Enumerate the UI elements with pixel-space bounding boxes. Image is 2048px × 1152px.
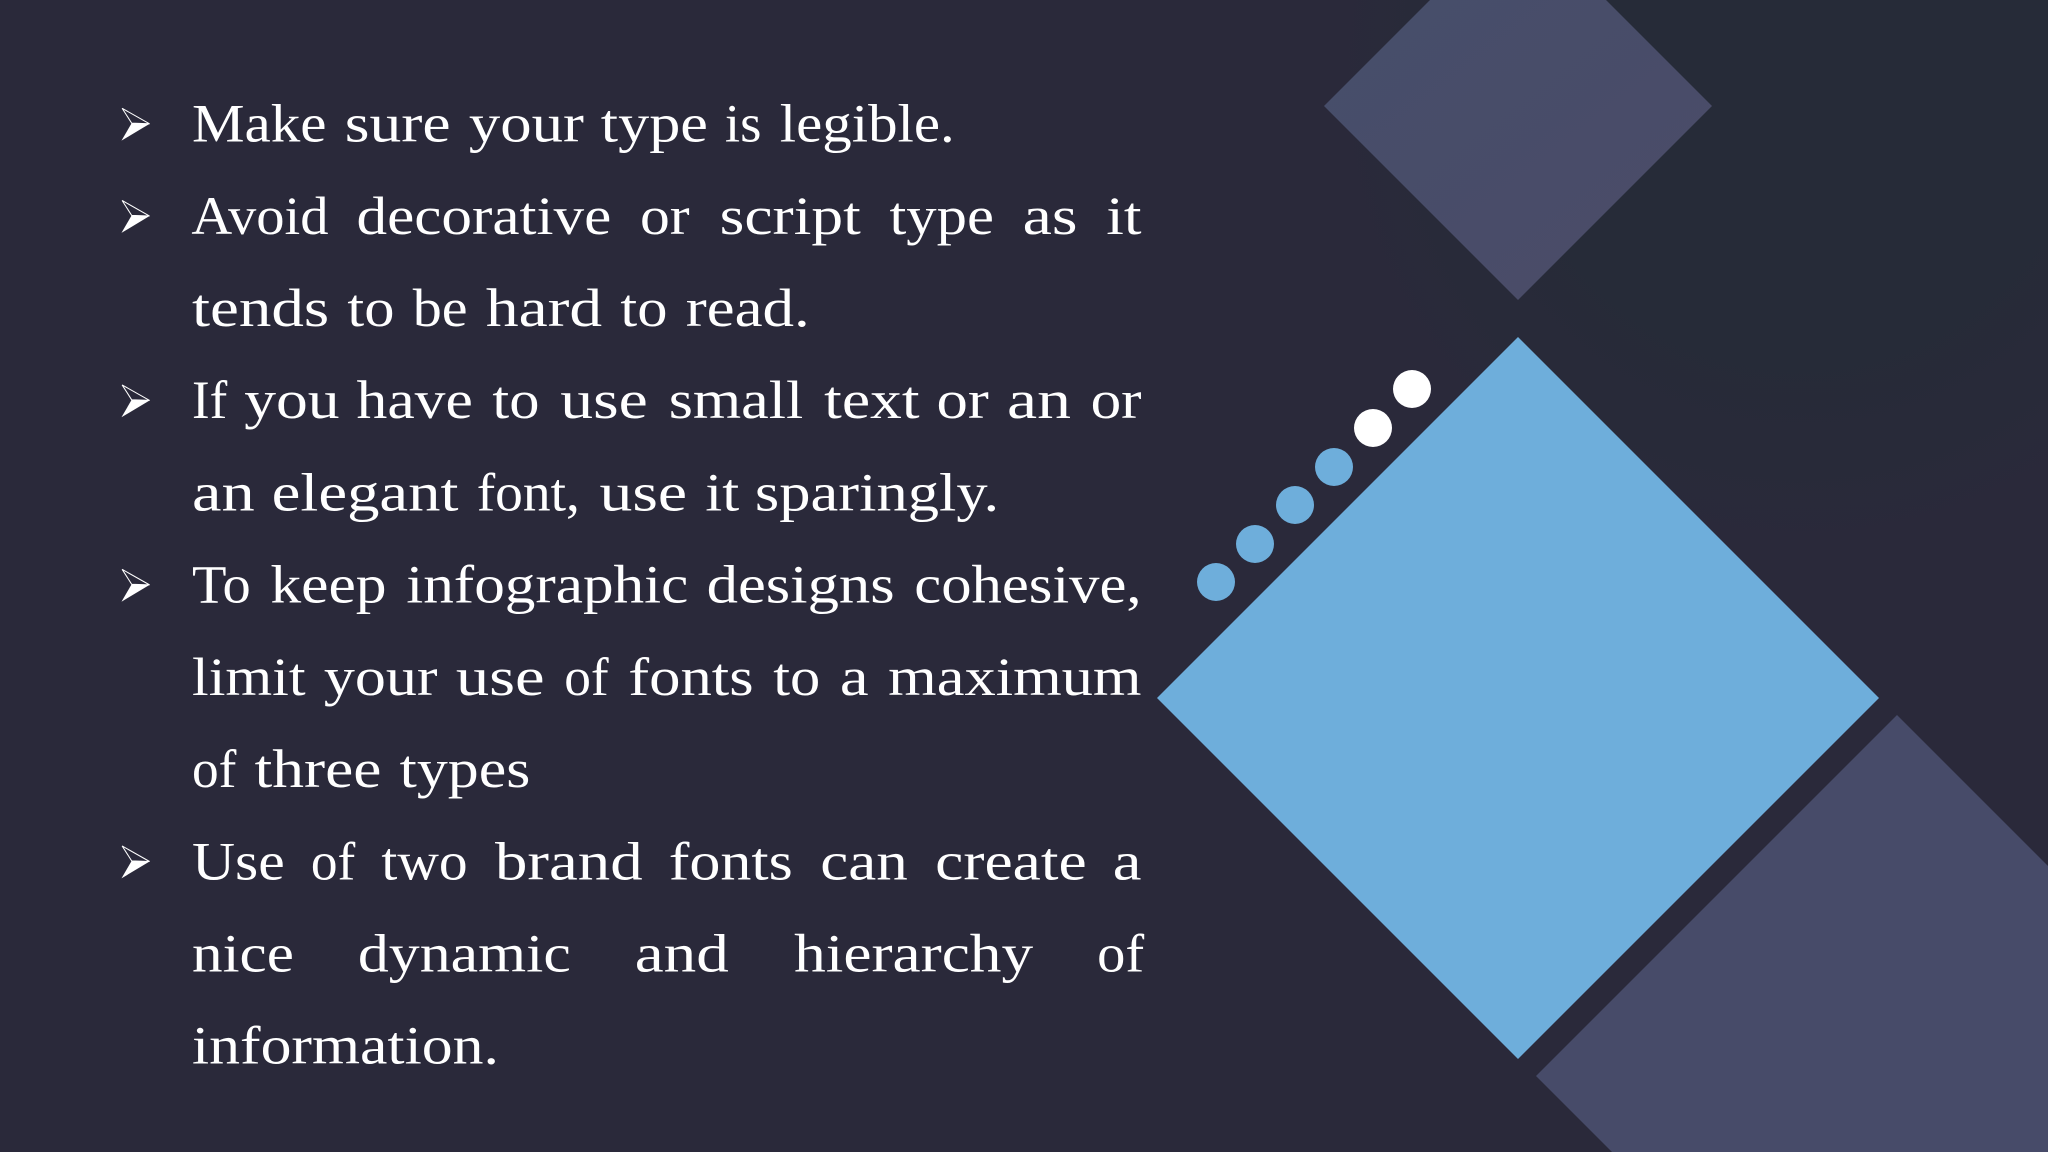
icon: arrow bullet	[121, 846, 150, 878]
bullet 3: small or elegant fonts: sparingly.	[755, 462, 999, 522]
bullet 3: small or elegant fonts: If	[192, 370, 227, 430]
bullet 5: two brand fonts: of	[311, 831, 355, 891]
bullet 2: avoid decorative type: to	[620, 278, 667, 338]
bullet 4: limit fonts: limit	[192, 647, 306, 707]
bullet 2: avoid decorative type: hard	[486, 278, 602, 338]
bullet 2: avoid decorative type: be	[413, 278, 468, 338]
bullet 4: limit fonts: To	[192, 555, 251, 615]
bullet 3: small or elegant fonts: use	[560, 370, 648, 430]
bullet 3: small or elegant fonts: small	[669, 370, 803, 430]
bullet list	[121, 94, 1144, 1076]
bullet 2: avoid decorative type: tends	[192, 278, 329, 338]
bullet 4: limit fonts: a	[840, 647, 869, 707]
bullet 5: two brand fonts: and	[635, 923, 729, 983]
bullet 5: two brand fonts: Use	[192, 831, 285, 891]
icon: arrow bullet	[121, 385, 150, 417]
bullet 4: limit fonts	[121, 555, 1142, 799]
bullet 2: avoid decorative type: to	[347, 278, 394, 338]
icon: arrow bullet	[121, 200, 150, 233]
bullet 1: legible type	[121, 94, 955, 154]
bullet 2: avoid decorative type	[121, 186, 1142, 338]
bullet 2: avoid decorative type: read.	[686, 278, 810, 338]
bullet 5: two brand fonts: of	[1097, 923, 1144, 983]
bullet 2: avoid decorative type: as	[1023, 186, 1078, 246]
bullet 4: limit fonts: maximum	[888, 647, 1142, 707]
bullet 2: avoid decorative type: script	[720, 186, 861, 246]
bullet 2: avoid decorative type: it	[1106, 186, 1142, 246]
bullet 5: two brand fonts	[121, 831, 1144, 1076]
bullet 4: limit fonts: keep	[270, 555, 387, 615]
bullet 3: small or elegant fonts: use	[600, 462, 687, 522]
bullet 5: two brand fonts: can	[820, 831, 908, 891]
bullet 2: avoid decorative type: decorative	[357, 186, 611, 246]
bullet 1: legible type: Make	[192, 94, 327, 154]
bullet 3: small or elegant fonts: elegant	[272, 462, 459, 522]
bullet 4: limit fonts: your	[324, 647, 438, 707]
bullet 5: two brand fonts: create	[935, 831, 1087, 891]
dotted diagonal accent	[1197, 370, 1431, 601]
bullet 5: two brand fonts: dynamic	[358, 923, 571, 983]
bullet 4: limit fonts: of	[192, 739, 237, 799]
bullet 3: small or elegant fonts: it	[705, 462, 739, 522]
bullet 3: small or elegant fonts: have	[357, 370, 473, 430]
bullet 4: limit fonts: of	[564, 647, 609, 707]
bullet 4: limit fonts: three	[255, 739, 381, 799]
bullet 1: legible type: type	[601, 94, 708, 154]
bullet 3: small or elegant fonts: to	[492, 370, 539, 430]
bullet 5: two brand fonts: hierarchy	[794, 923, 1033, 983]
bullet 5: two brand fonts: a	[1113, 831, 1142, 891]
top muted diamond	[1324, 0, 1712, 300]
bullet 4: limit fonts: types	[400, 739, 530, 799]
bullet 4: limit fonts: infographic	[406, 555, 688, 615]
bullet 3: small or elegant fonts	[121, 370, 1142, 522]
bullet 3: small or elegant fonts: or	[936, 370, 989, 430]
large blue diamond	[1157, 337, 1879, 1059]
bullet 3: small or elegant fonts: an	[192, 462, 255, 522]
bullet 5: two brand fonts: two	[381, 831, 468, 891]
bullet 4: limit fonts: use	[456, 647, 545, 707]
bullet 1: legible type: sure	[345, 94, 451, 154]
bullet 2: avoid decorative type: type	[889, 186, 994, 246]
bottom right muted diamond	[1536, 715, 2048, 1152]
bullet 3: small or elegant fonts: an	[1007, 370, 1071, 430]
bullet 3: small or elegant fonts: you	[244, 370, 340, 430]
bullet 4: limit fonts: cohesive,	[914, 555, 1142, 615]
bullet 4: limit fonts: to	[773, 647, 820, 707]
bullet 2: avoid decorative type: Avoid	[191, 186, 329, 246]
bullet 5: two brand fonts: fonts	[669, 831, 793, 891]
bullet 5: two brand fonts: brand	[495, 831, 643, 891]
bullet 5: two brand fonts: nice	[192, 923, 294, 983]
bullet 1: legible type: legible.	[780, 94, 955, 154]
bullet 4: limit fonts: fonts	[628, 647, 754, 707]
bullet 3: small or elegant fonts: text	[824, 370, 920, 430]
bullet 5: two brand fonts: information.	[192, 1016, 499, 1076]
bullet 1: legible type: your	[469, 94, 584, 154]
icon: arrow bullet	[121, 569, 150, 602]
bullet 3: small or elegant fonts: font,	[477, 462, 580, 522]
bullet 1: legible type: is	[725, 94, 761, 154]
icon: arrow bullet	[121, 108, 150, 141]
bullet 3: small or elegant fonts: or	[1091, 370, 1142, 430]
bullet 4: limit fonts: designs	[707, 555, 895, 615]
bullet 2: avoid decorative type: or	[640, 186, 690, 246]
